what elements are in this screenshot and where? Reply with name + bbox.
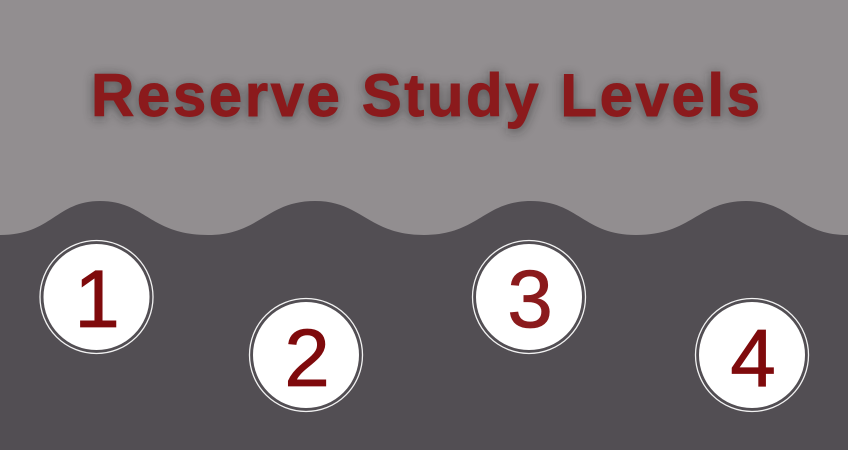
badge: level 1 (40, 240, 153, 354)
panel: light grey wavy header (0, 0, 848, 235)
badge: level 3 (472, 240, 586, 354)
title: Reserve Study Levels (91, 64, 760, 131)
badge: level 4 (696, 298, 808, 412)
badge: level 2: 2 (284, 313, 330, 404)
title: Reserve Study Levels (91, 62, 760, 129)
badge: level 4: 4 (730, 313, 776, 404)
badge: level 1: 1 (74, 254, 120, 345)
badge: level 2 (250, 298, 362, 412)
badge: level 3: 3 (507, 254, 553, 345)
